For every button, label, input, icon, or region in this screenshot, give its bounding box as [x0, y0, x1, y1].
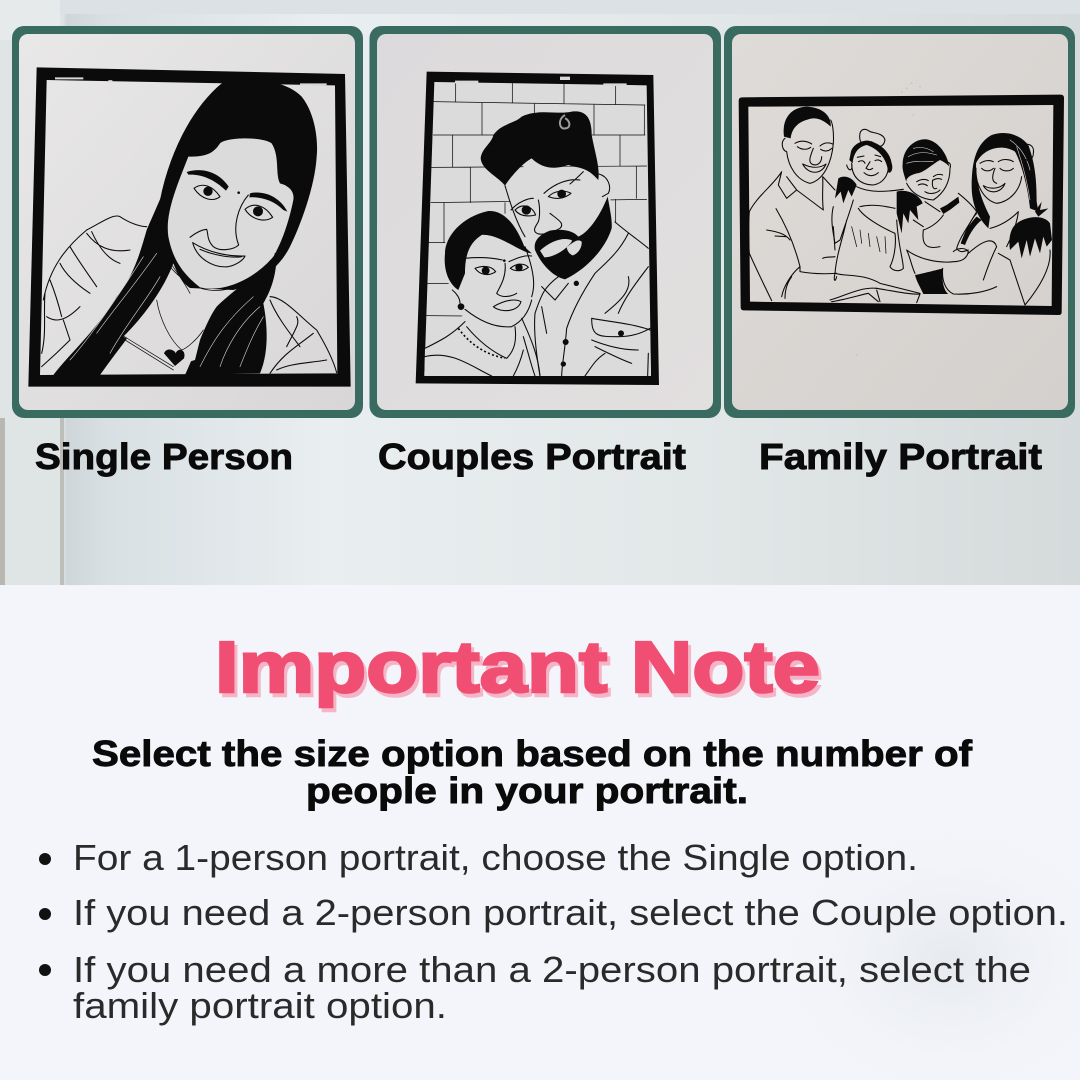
woman's face	[481, 234, 504, 241]
frame	[416, 72, 659, 385]
baby: bow	[860, 129, 885, 146]
bullet item: single: For a 1-person portrait, choose the Single option.	[73, 837, 918, 878]
woman's clothing lines	[424, 318, 540, 376]
panel: single person portrait	[12, 26, 363, 418]
panel: couples portrait	[370, 26, 721, 418]
father: shirt	[749, 172, 877, 301]
mother: flower	[1023, 144, 1034, 160]
woman's face lines	[465, 247, 534, 327]
mother: feather sleeve	[1009, 217, 1052, 258]
panel: bottom note background	[0, 585, 1080, 1080]
man's face fill	[510, 166, 611, 202]
baby: head	[849, 141, 892, 173]
hair top	[159, 80, 317, 290]
man's beard	[535, 197, 612, 279]
title: important note: Important Note	[218, 632, 823, 712]
bullet list	[39, 837, 1068, 1026]
hair right lower	[185, 266, 276, 374]
mother: face	[976, 160, 1022, 203]
jaw and neck lines	[123, 263, 227, 370]
jacket lines	[42, 216, 147, 367]
woman's earring	[452, 290, 460, 303]
heart pendant	[164, 349, 185, 366]
label: couples portrait: Couples Portrait	[378, 436, 686, 477]
hair ornaments	[108, 80, 112, 82]
background: wall photo	[0, 0, 1080, 585]
mother: body	[942, 212, 1050, 305]
subheading: Select the size option based on the number of	[92, 733, 973, 774]
father: hair	[784, 107, 831, 138]
neck and chest	[123, 264, 200, 362]
bullet item: family	[39, 949, 1031, 1026]
nose and mouth	[190, 195, 248, 267]
boy: body	[907, 193, 977, 273]
eyebrows	[187, 170, 287, 212]
subheading	[92, 733, 973, 811]
frame	[28, 67, 351, 387]
hook reflections	[455, 77, 627, 86]
wall marks	[856, 79, 921, 356]
glass panel	[424, 83, 651, 376]
brick lines	[426, 82, 647, 316]
frame	[739, 95, 1064, 315]
boy: hair	[902, 139, 949, 183]
man's ear	[599, 174, 610, 197]
bullet item: couple: If you need a 2-person portrait, select the Couple option.	[73, 892, 1068, 933]
panel: family portrait	[724, 26, 1075, 418]
title: important note: Important Note	[215, 628, 820, 708]
label: single person: Single Person	[35, 436, 293, 477]
father: head	[782, 120, 834, 183]
face	[168, 138, 294, 289]
hair left	[53, 198, 162, 375]
hair streaks	[70, 253, 263, 367]
mother: hair	[972, 133, 1038, 228]
woman's hair	[445, 211, 532, 290]
baby: dress feathers and arm	[835, 177, 857, 203]
bullet item: family: If you need a more than a 2-person portrait, select the	[73, 949, 1031, 990]
man's buttons	[618, 330, 624, 336]
man's chin patch	[567, 240, 582, 255]
woman's neck and shirt	[424, 313, 538, 376]
label: family portrait: Family Portrait	[759, 436, 1042, 477]
boy: bow tie	[940, 197, 959, 214]
boy: trousers	[915, 268, 948, 294]
bullet item: family: family portrait option.	[73, 985, 447, 1026]
necklace	[458, 328, 505, 358]
man's lip	[540, 239, 572, 257]
man's hair	[481, 111, 599, 186]
boy: face	[907, 162, 950, 200]
man's face details	[505, 172, 583, 237]
man's shirt lines	[535, 222, 650, 376]
subheading: people in your portrait.	[306, 770, 748, 811]
eyes	[194, 185, 273, 220]
man's shirt fill	[532, 222, 651, 376]
